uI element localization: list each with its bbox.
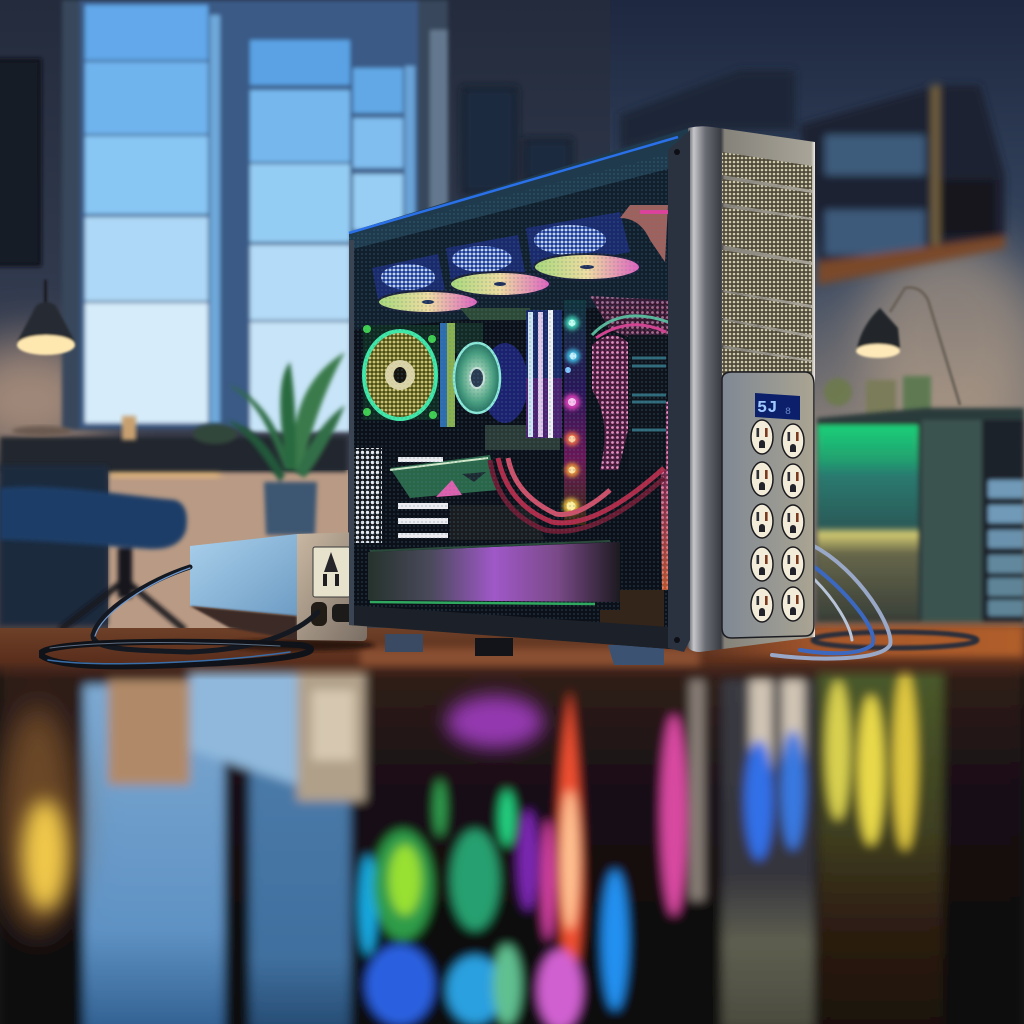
small surge box [190,532,375,651]
potted plant [226,352,345,535]
pink mesh cable area [592,316,682,590]
desk lamp right [856,288,960,405]
box front [297,532,367,641]
braided cables [490,458,664,531]
box bottom shadow [190,606,297,640]
desk and warm wall [0,416,348,635]
picture frames middle [463,88,571,193]
items on cabinet [824,376,931,416]
reflected box [190,666,365,801]
reflected pink streak [661,715,687,915]
shelves right [620,70,1005,285]
reflected yellow lights [818,670,943,1024]
reflected flame [541,690,582,985]
cpu cooler [440,323,528,427]
pci slots [398,457,448,538]
digital display [755,393,800,420]
digital display: 8 [785,407,791,418]
box side [190,534,297,616]
case interior [349,150,684,650]
graphics card [390,455,498,498]
ram sticks [526,310,562,438]
outlets [751,420,804,622]
pc feet [385,634,664,665]
reflected tall streaks near front panel [690,680,814,1024]
led strip [563,300,586,525]
right wall [610,0,1024,640]
cabinet right [817,408,1024,622]
front panel [686,126,815,652]
front fan [363,325,439,420]
top panel [349,128,690,250]
background room [0,0,1024,660]
table reflection [0,660,1024,1024]
front mesh grille [722,152,812,380]
digital display: 5J [757,399,777,418]
radiator fans [372,205,668,313]
reflected psu glow [447,696,543,748]
drive bays right [628,335,666,470]
left dotted vent [352,448,382,543]
psu shroud [349,541,684,650]
reflected peach wall [108,680,190,785]
motherboard [460,308,560,450]
cables right [772,545,977,659]
pc case [349,126,815,665]
cables left [42,567,318,666]
reflected warm lamp [0,705,78,935]
reflected window [84,685,350,1024]
gpu lower board [450,505,545,540]
desk lamp left [17,280,75,355]
plugs [311,602,371,626]
chair [0,486,187,630]
outlet panel [722,372,814,638]
window [62,0,448,432]
picture frame left [0,60,40,265]
table surface [0,625,1024,680]
box outlet plate [313,547,350,597]
pink mesh right [590,296,668,345]
reflected green and blue blobs [359,780,628,1024]
case corner post [668,130,690,652]
